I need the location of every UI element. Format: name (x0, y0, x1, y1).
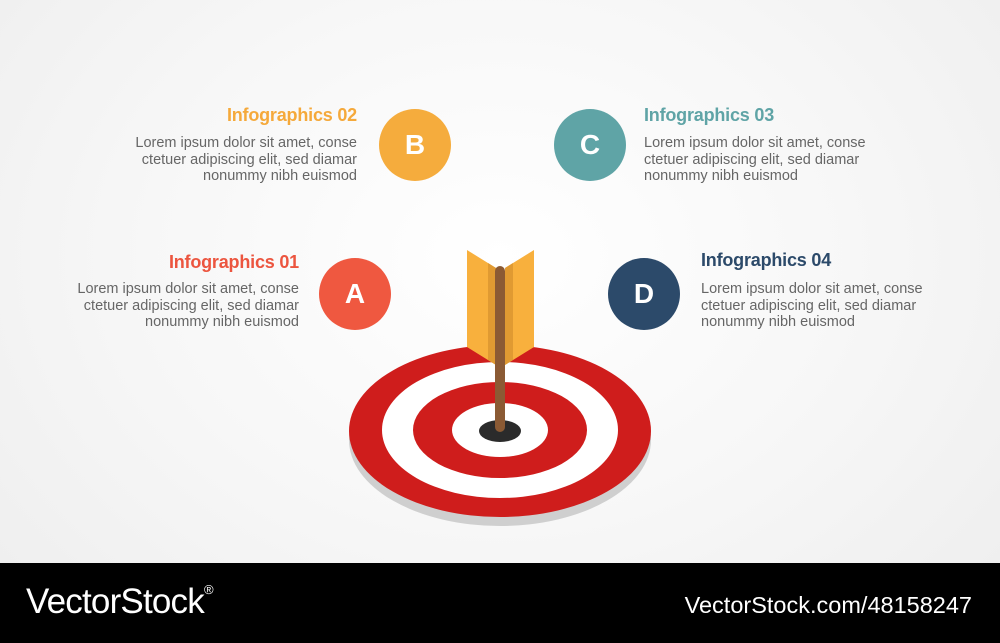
text: item 02: ctetuer adipiscing elit, sed diamar (142, 152, 357, 168)
circle B (379, 109, 451, 181)
text: item 04: Lorem ipsum dolor sit amet, conse (701, 281, 923, 297)
text: item 02: Lorem ipsum dolor sit amet, conse (135, 135, 357, 151)
circle A (319, 258, 391, 330)
text: item 01 (77, 281, 299, 330)
text: item 03: Lorem ipsum dolor sit amet, conse (644, 135, 866, 151)
title: Infographics 02: Infographics 02 (227, 105, 357, 125)
title: Infographics 01: Infographics 01 (169, 252, 299, 272)
text: item 03: nonummy nibh euismod (644, 168, 798, 184)
circle C: C (580, 129, 600, 160)
circle B: B (405, 129, 425, 160)
footer bar (0, 563, 1000, 643)
circle C (554, 109, 626, 181)
circle A: A (345, 278, 365, 309)
title: Infographics 04: Infographics 04 (701, 250, 831, 270)
title: Infographics 03: Infographics 03 (644, 105, 774, 125)
text: item 04 (701, 281, 923, 330)
footer url: VectorStock.com/48158247 (685, 592, 972, 618)
text: item 03 (644, 135, 866, 184)
text: item 01: ctetuer adipiscing elit, sed diamar (84, 298, 299, 314)
text: item 01: Lorem ipsum dolor sit amet, conse (77, 281, 299, 297)
text: item 02 (135, 135, 357, 184)
text: item 04: ctetuer adipiscing elit, sed diamar (701, 298, 916, 314)
text: item 02: nonummy nibh euismod (203, 168, 357, 184)
text: item 03: ctetuer adipiscing elit, sed diamar (644, 152, 859, 168)
circle D: D (634, 278, 654, 309)
footer logo: VectorStock® (26, 582, 213, 621)
circle D (608, 258, 680, 330)
text: item 04: nonummy nibh euismod (701, 314, 855, 330)
text: item 01: nonummy nibh euismod (145, 314, 299, 330)
